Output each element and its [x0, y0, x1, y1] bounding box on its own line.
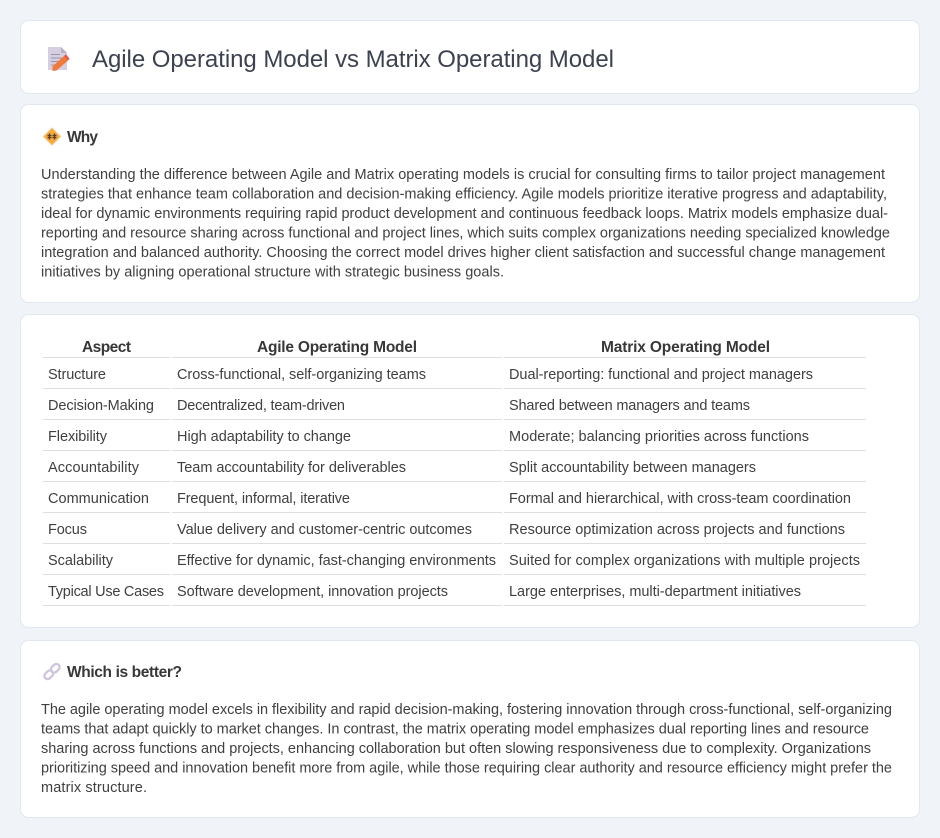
why paragraph: ideal for dynamic environments requiring rapid product development and continuous feedback loops. Matrix models emphasize dual-	[41, 206, 888, 222]
why paragraph: strategies that enhance team collaboration and decision-making efficiency. Agile models prioritize iterative progress and adaptability,	[41, 186, 887, 202]
row: focus: Focus	[48, 522, 87, 538]
row: structure: Structure	[48, 367, 106, 383]
row: flexibility: Moderate; balancing priorities across functions	[509, 429, 809, 445]
which is better paragraph: matrix structure.	[41, 780, 147, 796]
title heading: Agile Operating Model vs Matrix Operating Model	[92, 46, 614, 73]
row: scalability: Effective for dynamic, fast-changing environments	[177, 553, 496, 569]
panel: which is better	[20, 640, 920, 818]
panel: why	[20, 104, 920, 302]
icon: diamond road sign	[44, 128, 60, 145]
why paragraph: reporting and resource sharing across functional and project lines, which suits complex organizations needing specialized knowledge	[41, 226, 890, 242]
row: decision-making: Shared between managers and teams	[509, 398, 750, 414]
row: typical use cases	[43, 584, 866, 606]
row: focus: Value delivery and customer-centric outcomes	[177, 522, 472, 538]
row: typical use cases: Large enterprises, multi-department initiatives	[509, 584, 801, 600]
row: communication: Communication	[48, 491, 149, 507]
row: structure	[43, 367, 866, 389]
row: communication: Frequent, informal, iterative	[177, 491, 350, 507]
table header	[43, 339, 866, 358]
icon: chain link	[43, 663, 61, 680]
row: accountability: Accountability	[48, 460, 140, 476]
row: accountability	[43, 460, 866, 482]
row: communication: Formal and hierarchical, with cross-team coordination	[509, 491, 851, 507]
which is better paragraph: The agile operating model excels in flexibility and rapid decision-making, fostering innovation through cross-functional, self-organizing	[41, 702, 892, 718]
row: flexibility	[43, 429, 866, 451]
row: focus: Resource optimization across projects and functions	[509, 522, 845, 538]
row: scalability	[43, 553, 866, 575]
table header: Agile Operating Model	[257, 339, 417, 356]
row: structure: Dual-reporting: functional and project managers	[509, 367, 813, 383]
row: flexibility: High adaptability to change	[177, 429, 351, 445]
row: accountability: Split accountability between managers	[509, 460, 756, 476]
row: accountability: Team accountability for deliverables	[177, 460, 406, 476]
why paragraph: Understanding the difference between Agile and Matrix operating models is crucial for consulting firms to tailor project management	[41, 167, 885, 183]
table header: Matrix Operating Model	[601, 339, 770, 356]
which is better paragraph: prioritizing speed and innovation benefit more from agile, while those requiring clear authority and resource efficiency might prefer the	[41, 760, 892, 776]
which is better heading: Which is better?	[67, 664, 182, 681]
row: typical use cases: Typical Use Cases	[48, 584, 164, 600]
why paragraph: integration and balanced authority. Choosing the correct model drives higher client satisfaction and successful change management	[41, 245, 885, 261]
row: typical use cases: Software development, innovation projects	[177, 584, 448, 600]
row: structure: Cross-functional, self-organizing teams	[177, 367, 426, 383]
row: decision-making: Decision-Making	[48, 398, 154, 414]
row: decision-making: Decentralized, team-driven	[177, 398, 345, 414]
which is better paragraph: teams that adapt quickly to market changes. In contrast, the matrix operating model emphasizes dual reporting lines and resource	[41, 722, 869, 738]
why paragraph: initiatives by aligning operational structure with strategic business goals.	[41, 264, 504, 280]
why paragraph	[41, 167, 890, 280]
why heading: Why	[67, 129, 98, 146]
row: scalability: Scalability	[48, 553, 114, 569]
which is better paragraph	[41, 702, 892, 796]
table header: Aspect	[82, 339, 131, 356]
row: decision-making	[43, 398, 866, 420]
icon: document with pencil	[48, 47, 70, 71]
row: communication	[43, 491, 866, 513]
row: focus	[43, 522, 866, 544]
panel: title	[20, 20, 920, 94]
panel: comparison table	[20, 314, 920, 628]
row: scalability: Suited for complex organizations with multiple projects	[509, 553, 860, 569]
row: flexibility: Flexibility	[48, 429, 108, 445]
which is better paragraph: sharing across functions and projects, enhancing collaboration but often slowing responsiveness due to complexity. Organizations	[41, 741, 871, 757]
